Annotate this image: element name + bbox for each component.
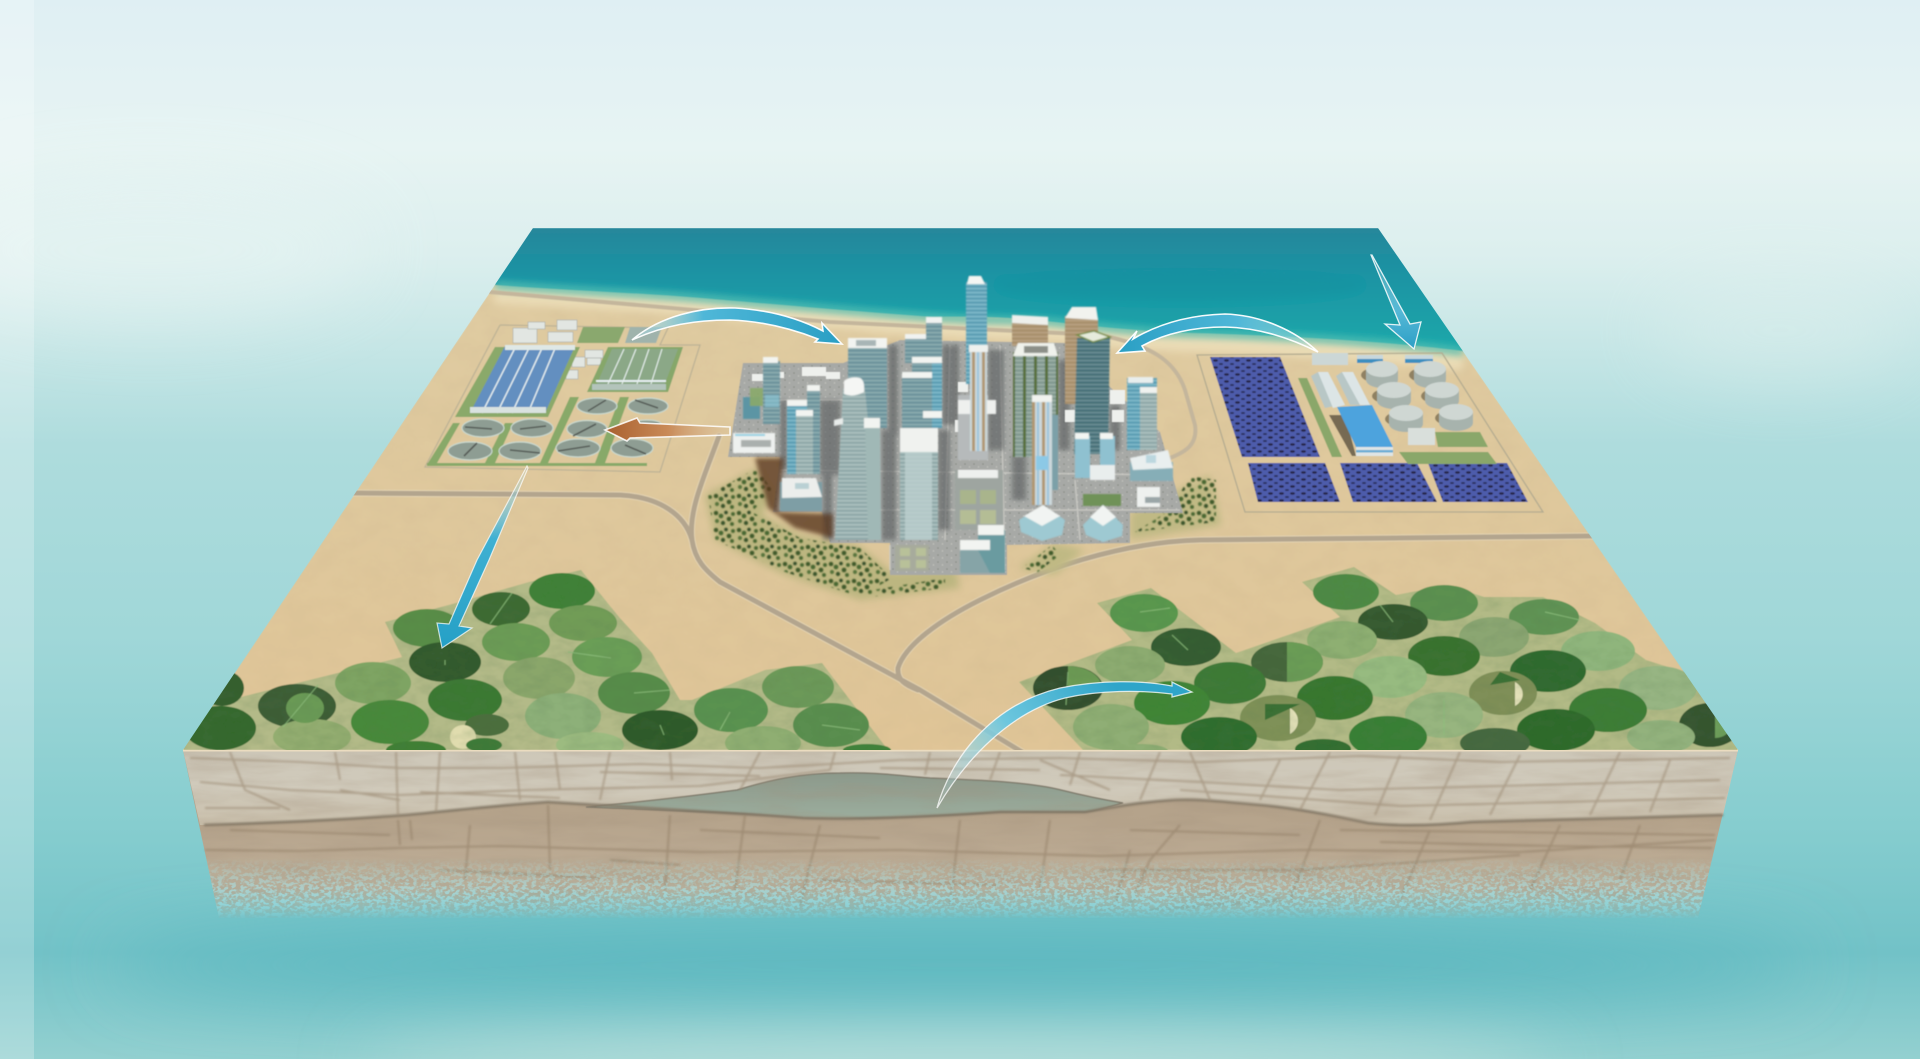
tower: big pale round — [834, 377, 881, 540]
city ground grid — [728, 340, 1183, 575]
tower: right blue — [1127, 377, 1157, 450]
block: white small right — [1137, 487, 1160, 507]
desal green strips — [1298, 378, 1497, 464]
skyscrapers — [733, 276, 1173, 573]
low-rise blocks — [752, 367, 1125, 479]
right field mottling — [1020, 565, 1738, 750]
clarifier green strips — [427, 397, 647, 466]
tower: back tan low — [1012, 315, 1048, 346]
city green belt — [705, 468, 1222, 600]
tower: tallest — [966, 276, 987, 384]
site boundary — [1197, 353, 1543, 512]
blue basin — [455, 345, 580, 417]
desalination and solar plant — [1197, 353, 1543, 512]
tower: big white slab — [900, 428, 938, 540]
tower: rear left — [905, 317, 942, 363]
aquifer lens — [586, 773, 1123, 819]
green basin — [587, 347, 683, 392]
tower: bottom front — [960, 525, 1005, 573]
arrow: aquifer to farm — [937, 682, 1192, 808]
sand texture — [183, 228, 1738, 750]
left field mottling — [183, 565, 893, 750]
arrow: sea water to desalination — [1371, 255, 1421, 349]
strata boundary line — [204, 800, 1723, 825]
plant top buildings — [513, 320, 603, 379]
block: low right twin — [1075, 433, 1115, 480]
arrow: desalinated water to city — [1117, 314, 1318, 353]
arrow: treated water to city — [632, 308, 842, 344]
pavilion left — [1019, 505, 1065, 541]
long membrane halls — [1311, 372, 1370, 408]
beach highlight — [495, 294, 1463, 362]
block side: rock strata — [183, 749, 1738, 923]
teal speckle at the fading base — [209, 862, 1710, 917]
arrow: reclaimed water to farm — [437, 466, 528, 648]
block: plaza — [780, 478, 822, 511]
tower: mid left — [902, 357, 942, 428]
tower: white ribbon — [1032, 395, 1058, 505]
small control building — [1408, 428, 1435, 445]
tower: dark green — [1074, 331, 1110, 454]
tower: green wall — [1013, 343, 1058, 457]
tower: behind stripes — [958, 395, 996, 460]
storage tanks — [1361, 361, 1473, 432]
tower: back tan tall — [1065, 307, 1098, 404]
solar panels — [1210, 357, 1528, 502]
block: left low — [733, 433, 775, 453]
block: right low — [1130, 450, 1173, 481]
sea — [495, 228, 1470, 352]
rock cracks upper — [190, 752, 1730, 820]
coastal road — [490, 292, 1195, 458]
roads — [352, 292, 1592, 752]
top edge highlight — [183, 749, 1738, 752]
farmland: right fields — [1019, 567, 1741, 759]
rock texture — [184, 752, 1730, 820]
left pivot circles — [184, 573, 891, 760]
pavilion right — [1083, 505, 1123, 542]
plant green square — [577, 327, 625, 343]
left pivot arm lines — [283, 593, 860, 735]
farmland: left fields — [182, 570, 891, 760]
block: far left low — [743, 388, 763, 419]
right field patch — [1019, 567, 1739, 750]
upper rock layer — [183, 750, 1738, 825]
tower: stripes centre — [969, 345, 988, 451]
desert sand — [234, 284, 1684, 750]
right pivot circles — [1033, 574, 1741, 759]
arrow: brown wastewater to treatment — [605, 418, 730, 441]
tower: square left — [848, 338, 887, 428]
clarifiers — [448, 398, 668, 460]
tower: twin left — [787, 385, 820, 474]
courtyards — [895, 470, 1121, 571]
tower: far left slim — [763, 357, 780, 424]
trees — [708, 468, 1216, 597]
water treatment plant — [425, 320, 700, 472]
city shadow on sand — [755, 458, 833, 538]
right pivot arm lines — [1066, 605, 1580, 735]
top surface — [182, 228, 1741, 760]
main blue hall — [1329, 405, 1393, 456]
rock cracks lower — [205, 805, 1715, 910]
plant boundary — [425, 325, 700, 472]
intake buildings — [1312, 353, 1433, 365]
clarifier arms — [464, 400, 658, 456]
building shadows — [780, 345, 1120, 540]
left field patch — [182, 570, 888, 750]
plant small tanks — [625, 327, 662, 343]
